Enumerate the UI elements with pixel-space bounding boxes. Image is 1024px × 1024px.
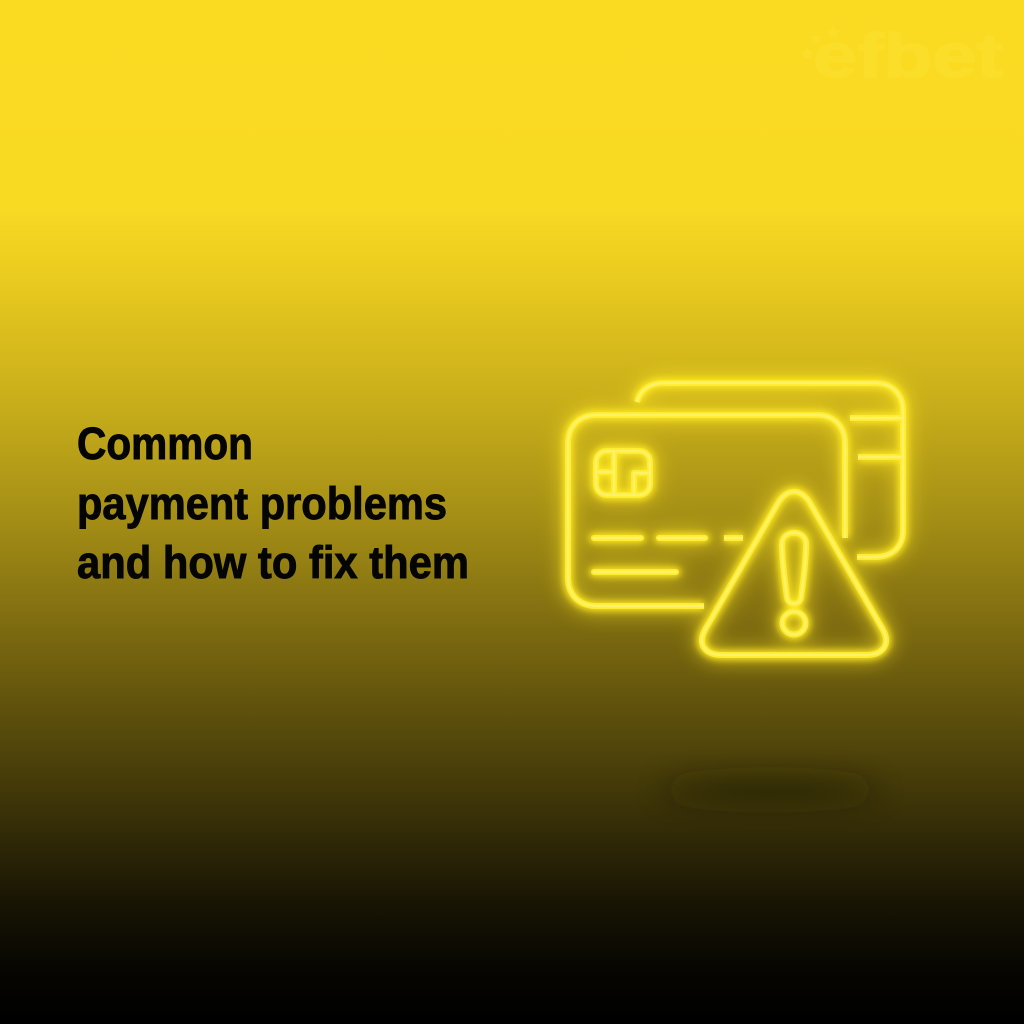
logo: efbet watermark — [801, 22, 1003, 91]
title line 1: Common — [77, 418, 253, 469]
floating shadow under icon — [660, 781, 880, 799]
icon: neon credit cards with warning triangle — [568, 383, 903, 655]
logo wordmark: efbet — [813, 22, 1003, 91]
title line 2: payment problems — [77, 478, 447, 529]
title line 3: and how to fix them — [77, 537, 469, 588]
title — [77, 418, 469, 588]
logo stars — [801, 24, 841, 59]
